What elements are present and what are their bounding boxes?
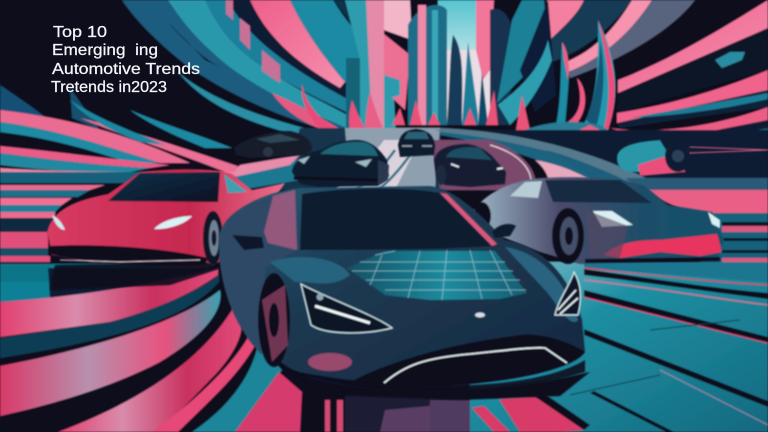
teal band right [625, 178, 768, 190]
car shadow on floor [290, 372, 590, 400]
lower bumper intake [345, 335, 585, 388]
dome and base of spires [500, 122, 640, 148]
silver sports car [472, 177, 724, 264]
upper left teal sweep [70, 0, 372, 148]
left swooshes [0, 85, 290, 264]
silver car red stripe [604, 234, 722, 258]
title [51, 24, 200, 96]
red car left headlight [52, 215, 65, 230]
silver car windows [545, 180, 652, 203]
black car centre [292, 140, 389, 187]
front dark sports car with solar hood [219, 186, 585, 392]
side window [264, 190, 297, 250]
central road stripes [230, 128, 768, 190]
distant car centre [398, 129, 435, 157]
right sweeping pink and teal bands [384, 0, 768, 190]
tube object by roadside [617, 140, 768, 176]
right floor [430, 262, 768, 432]
red car right headlight [154, 216, 192, 229]
silver car wheels [552, 208, 584, 264]
distant car left [234, 131, 312, 158]
red sports car [47, 169, 285, 268]
distant city left [226, 0, 396, 135]
pink band behind right car [640, 190, 768, 213]
solar panel on hood [347, 250, 527, 300]
red car side window [224, 174, 247, 193]
left floor [0, 262, 470, 432]
red car windshield [108, 172, 220, 202]
title: Automotive Trends [52, 61, 200, 78]
red car wheel [203, 211, 223, 265]
silver car headlight [593, 211, 633, 227]
left headlight [301, 284, 392, 333]
futuristic skyline towers [302, 0, 615, 135]
title: Tretends in2023 [51, 79, 167, 96]
black car right of centre [434, 144, 506, 187]
bumper light strip [384, 348, 567, 383]
windshield [300, 189, 492, 250]
front wheel [258, 273, 290, 367]
right headlight [555, 272, 581, 315]
sky [438, 0, 480, 80]
hood highlight [505, 247, 578, 322]
upper pink sweep [250, 0, 345, 88]
side mirrors [232, 235, 264, 250]
fender glow [308, 353, 352, 371]
red car reflection shadow [50, 262, 222, 290]
red car lower grille [50, 245, 208, 266]
title: Top 10 [53, 24, 107, 41]
hood badge [475, 312, 485, 318]
title: Emerging ing [52, 42, 158, 59]
